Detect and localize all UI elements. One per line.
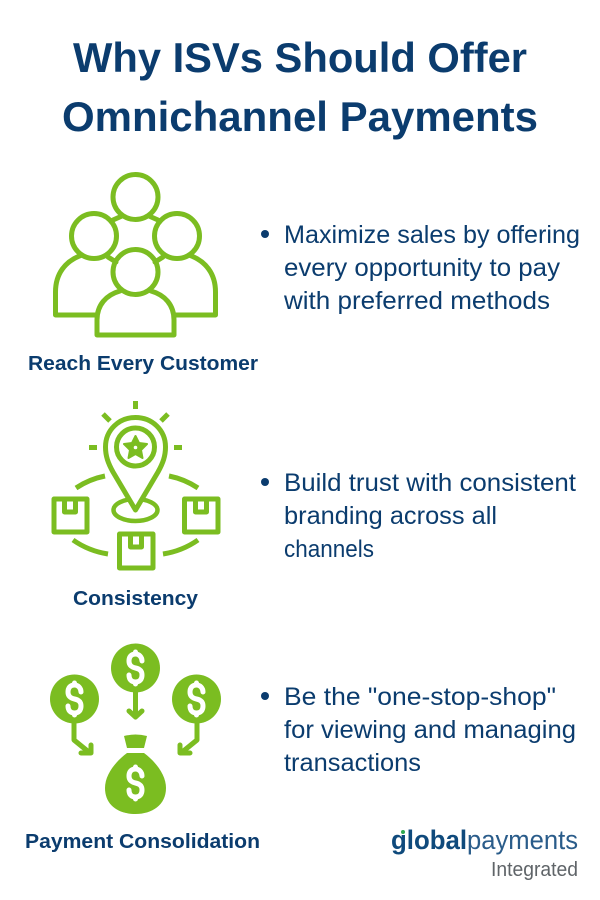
title: Why ISVs Should Offer <box>73 34 527 81</box>
title <box>62 34 538 140</box>
text block: consistency: branding across all <box>284 502 497 530</box>
logo: global payments integrated: payments <box>467 825 578 855</box>
text block: consistency <box>261 469 576 563</box>
text block: reach every customer: every opportunity to pay <box>284 254 561 282</box>
heading: consistency: Consistency <box>73 588 199 610</box>
title: Omnichannel Payments <box>62 93 538 140</box>
text block: payment consolidation: for viewing and managing <box>284 716 576 744</box>
icon: money converging into bag <box>50 644 221 814</box>
text block: reach every customer: with preferred methods <box>283 287 550 315</box>
text block: reach every customer: Maximize sales by offering <box>284 221 580 249</box>
text block: payment consolidation <box>261 683 576 777</box>
logo: global payments integrated <box>391 825 578 881</box>
icon: location pin with boxes <box>54 401 218 568</box>
icon: group of people <box>56 174 216 335</box>
logo: global payments integrated: global <box>391 825 467 855</box>
logo: global payments integrated: Integrated <box>491 859 578 881</box>
heading: reach every customer: Reach Every Customer <box>28 353 258 375</box>
text block: reach every customer <box>261 221 580 315</box>
text block: consistency: channels <box>284 536 374 563</box>
text block: payment consolidation: Be the "one-stop-shop" <box>284 683 556 711</box>
text block: payment consolidation: transactions <box>284 749 421 777</box>
heading: payment consolidation: Payment Consolidation <box>25 831 260 853</box>
text block: consistency: Build trust with consistent <box>284 469 576 497</box>
